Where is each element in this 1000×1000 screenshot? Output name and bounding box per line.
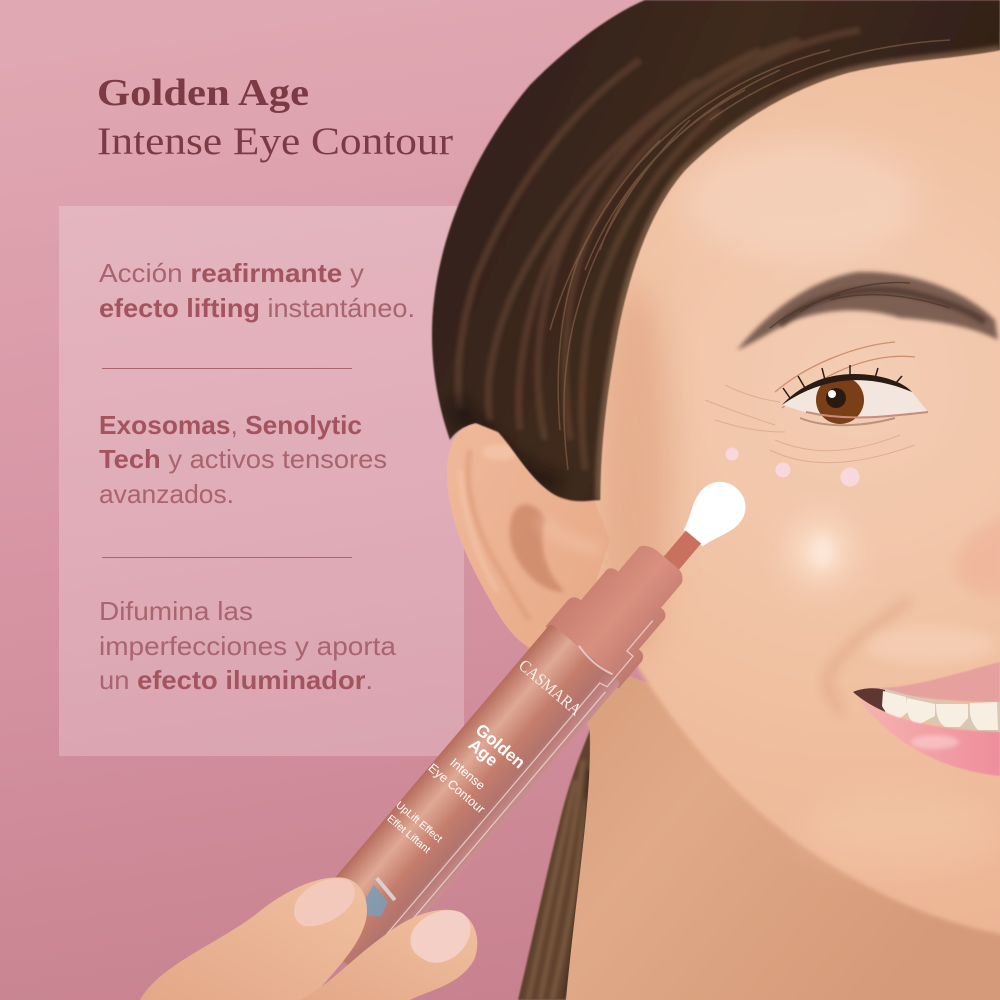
benefit text: actives: Tech y activos tensores bbox=[99, 444, 387, 474]
tube text: UpLift Effect bbox=[393, 799, 445, 845]
sealed edge lines bbox=[344, 595, 660, 955]
benefit text: illuminating: Difumina las bbox=[99, 596, 253, 626]
thumb bbox=[140, 877, 367, 1000]
eyebrow bbox=[737, 272, 998, 350]
benefit text: lifting: efecto lifting instantáneo. bbox=[99, 293, 415, 323]
benefit text: actives bbox=[99, 410, 387, 509]
benefit text: illuminating: un efecto iluminador . bbox=[99, 665, 373, 695]
eye wrinkles bbox=[705, 385, 915, 463]
hair bbox=[432, 0, 1000, 501]
mouth bbox=[853, 662, 1000, 776]
ear bbox=[447, 423, 610, 650]
benefit text: lifting: Acción reafirmante y bbox=[99, 258, 364, 288]
cream dots bbox=[726, 448, 860, 486]
tube text: Effet Liftant bbox=[385, 813, 433, 856]
title: Golden Age bbox=[97, 72, 309, 114]
thumb nail bbox=[294, 878, 355, 926]
cap segments bbox=[614, 540, 687, 613]
tube text bbox=[383, 653, 586, 872]
product tube bbox=[296, 452, 767, 983]
neck bbox=[520, 640, 1000, 1000]
tube text: Golden bbox=[472, 720, 529, 772]
index nail bbox=[411, 910, 470, 963]
soft hairline bbox=[600, 50, 1000, 500]
benefit text: illuminating bbox=[99, 596, 397, 695]
benefit text: illuminating: imperfecciones y aporta bbox=[99, 631, 397, 661]
benefit text: lifting bbox=[99, 258, 415, 323]
tube text: Age bbox=[465, 735, 501, 770]
tube text: Eye Contour bbox=[426, 761, 488, 816]
lower lip bbox=[856, 696, 1000, 776]
tube text: Intense bbox=[447, 756, 488, 793]
applicator neck bbox=[661, 531, 701, 572]
applicator tip bbox=[675, 472, 755, 555]
mouth interior and teeth bbox=[853, 688, 1000, 732]
index finger bbox=[300, 910, 477, 1000]
tube body bbox=[297, 623, 621, 982]
ponytail bbox=[518, 730, 590, 1000]
inner ear bbox=[510, 504, 565, 592]
translucent text panel bbox=[59, 206, 464, 756]
end ornament bbox=[352, 885, 394, 927]
helix fold bbox=[468, 450, 530, 620]
title bbox=[97, 72, 453, 163]
face bbox=[570, 30, 1000, 936]
benefit text: actives: avanzados. bbox=[99, 479, 234, 509]
hand holding tube bbox=[140, 877, 477, 1000]
eye bbox=[737, 272, 998, 425]
hair strands bbox=[455, 30, 1000, 500]
face shading bbox=[599, 140, 1000, 870]
upper lip bbox=[868, 662, 1000, 702]
tube text: CASMARA bbox=[515, 656, 586, 720]
title: Intense Eye Contour bbox=[97, 120, 453, 163]
benefit text: actives: Exosomas, Senolytic bbox=[99, 410, 362, 440]
